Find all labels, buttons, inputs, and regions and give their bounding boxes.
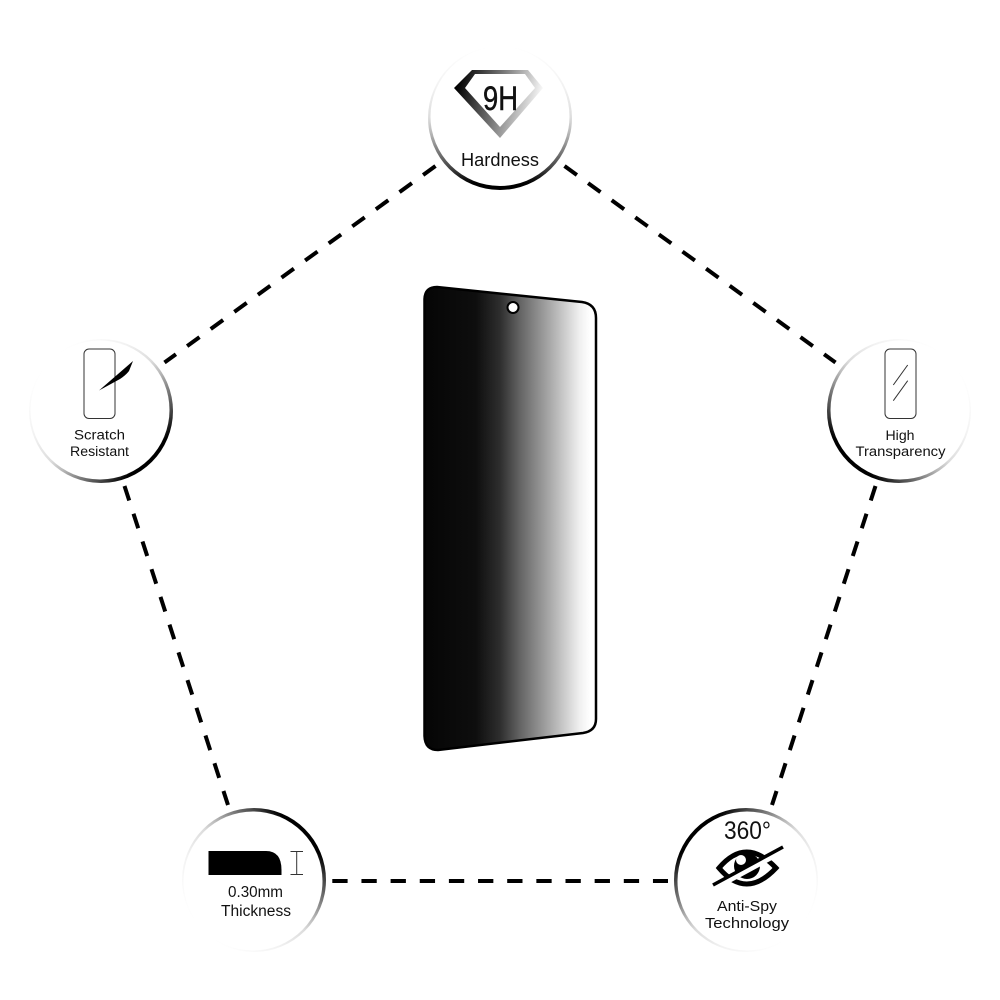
dashed connector: right to bottom right [772, 486, 876, 805]
icon: thickness marker [290, 852, 303, 874]
icon: glare lines [893, 365, 908, 401]
icon: glass edge profile [208, 851, 282, 875]
label line 2: Transparency [856, 444, 946, 459]
circle ring [428, 46, 572, 190]
360 degree label: 360° [724, 817, 771, 845]
circle ring [674, 808, 818, 952]
dashed connector: top to right [564, 166, 836, 362]
icon: scratch mark [99, 361, 133, 390]
dashed connector: left to bottom left [124, 486, 228, 805]
dashed connector: top to left [164, 166, 436, 362]
icon: crossed eye [713, 847, 783, 888]
circle ring [182, 808, 326, 952]
dashed connector: bottom [332, 879, 668, 883]
Hardness label: Hardness [461, 150, 539, 170]
9H label: 9H [483, 80, 518, 118]
feature: scratch resistant [29, 339, 173, 483]
icon: phone outline [885, 349, 916, 418]
circle ring [827, 339, 971, 483]
feature: 9H hardness [428, 46, 572, 190]
label: Scratch [74, 428, 125, 442]
label: High [886, 428, 914, 443]
feature: high transparency [827, 339, 971, 483]
icon: diamond [454, 70, 543, 138]
circle ring [29, 339, 173, 483]
label line 2: Resistant [70, 444, 129, 459]
label line 2: Thickness [221, 903, 291, 920]
icon: phone outline [84, 349, 115, 418]
label: Anti-Spy [717, 899, 778, 915]
feature: anti-spy technology [674, 808, 818, 952]
label line 2: Technology [705, 916, 790, 932]
camera hole [508, 302, 518, 313]
feature: thickness [182, 808, 326, 952]
label: 0.30mm [228, 884, 283, 901]
phone screen protector [424, 287, 596, 750]
